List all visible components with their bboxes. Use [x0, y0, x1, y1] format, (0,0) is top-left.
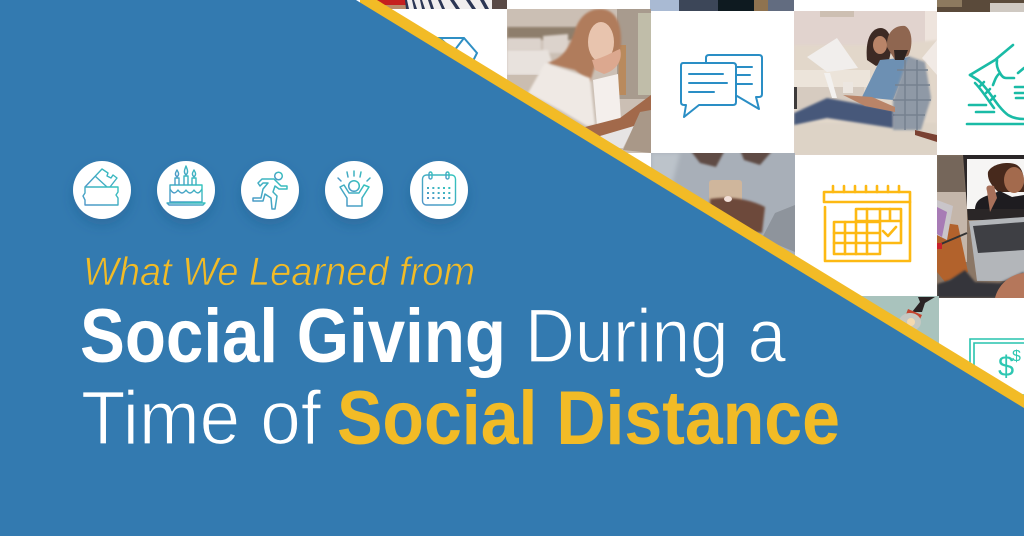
- title line 2: [81, 376, 840, 461]
- icon: money bills: [970, 339, 1024, 403]
- title line 2: Social Distance: [337, 376, 840, 461]
- title line 2: Time of: [81, 376, 322, 461]
- photo strip: top right: [937, 0, 1024, 12]
- yellow diagonal band: [360, 0, 1024, 412]
- icon: celebrating person: [325, 161, 383, 219]
- icon: birthday cake: [157, 161, 215, 219]
- photo: video call on laptop: [937, 155, 1024, 298]
- title line 1: [80, 294, 787, 379]
- icon: money bills: $: [998, 351, 1014, 383]
- title line 1: During a: [525, 294, 787, 379]
- icon row: five circular icons: [73, 161, 468, 219]
- photo: hanging light bulb: [862, 296, 939, 343]
- icon: running shoe: [967, 45, 1024, 124]
- title line 1: Social Giving: [80, 294, 506, 379]
- icon: yellow calendar: [824, 186, 910, 261]
- icon: running person: [241, 161, 299, 219]
- icon: chat bubbles: [681, 55, 762, 117]
- icon: envelope ticket outline: [436, 38, 477, 61]
- icon: calendar grid: [410, 161, 468, 219]
- photo: hands holding phone in grey sweater: [651, 153, 795, 256]
- kicker heading: What We Learned from: [83, 250, 475, 294]
- photo: couple on carpet with laptop: [794, 11, 937, 155]
- icon: money bills: $: [1012, 348, 1021, 365]
- icon: tickets: [73, 161, 131, 219]
- photo strip: top middle: [650, 0, 794, 11]
- photo strip: striped shirt: [377, 0, 507, 9]
- photo: woman smiling at laptop: [507, 9, 651, 153]
